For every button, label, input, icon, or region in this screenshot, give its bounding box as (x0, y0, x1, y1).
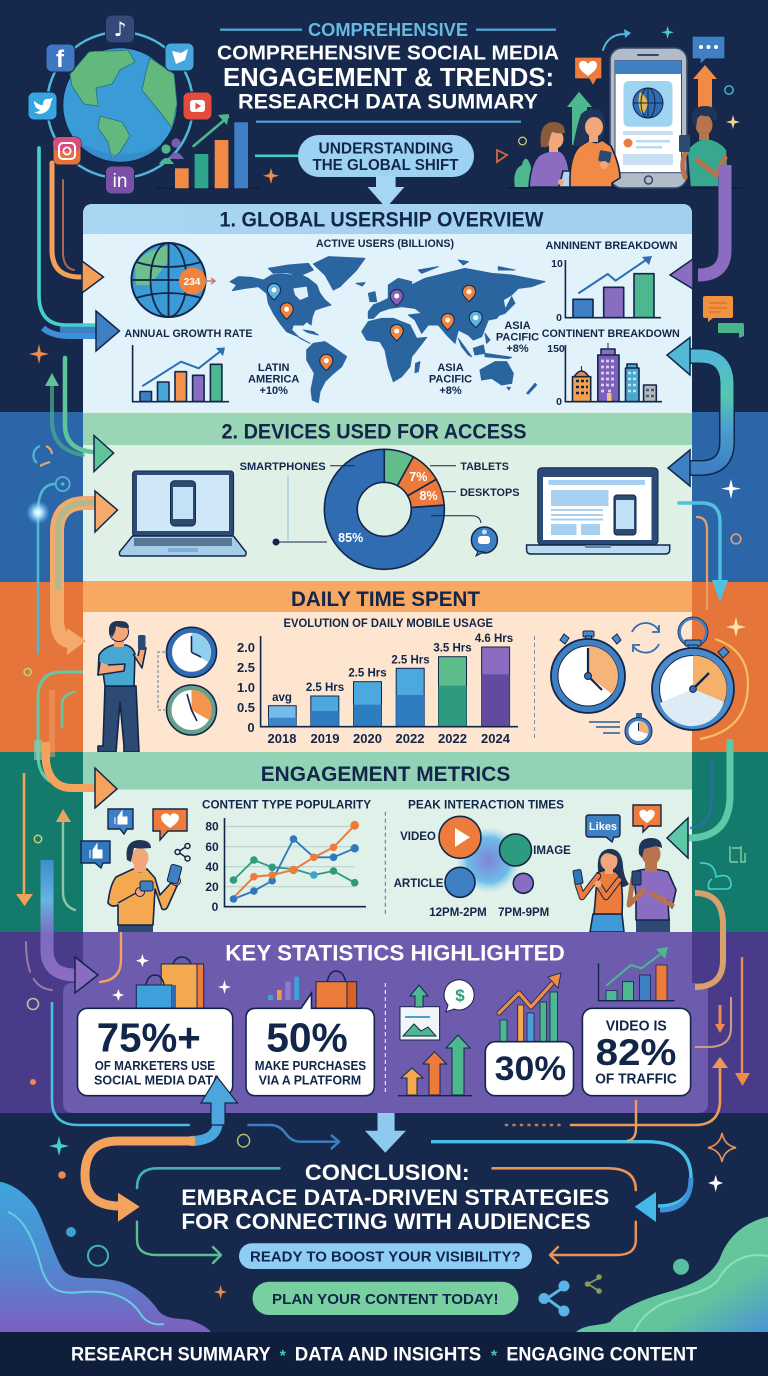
chart: city buildings: 0 (556, 396, 562, 408)
icon: dollar bubble: $ (455, 986, 465, 1005)
icon: laptop with phone (120, 471, 246, 556)
chart: content popularity lines: 40 (205, 860, 219, 874)
chart: city buildings: 150 (547, 343, 565, 355)
icon: orange sparkle (29, 344, 49, 364)
icon: share large (538, 1280, 570, 1316)
chart: content popularity lines: 0 (212, 900, 219, 914)
chart: peak interaction bubbles: 12PM-2PM (429, 907, 487, 919)
label: asia pacific lower: +8% (439, 385, 462, 397)
chart: device donut (324, 449, 444, 569)
section 5 panel: key statistics (63, 932, 708, 1113)
icon: chart photo with arrow (400, 985, 440, 1040)
arrow: small blue (248, 1125, 339, 1149)
chart: peak interaction bubbles: 7PM-9PM (498, 907, 549, 919)
conclusion section (0, 1003, 768, 1332)
heading: 1. GLOBAL USERSHIP OVERVIEW (220, 208, 544, 232)
arrow: small orange down (715, 1005, 725, 1033)
chart: content popularity lines (205, 818, 366, 914)
icon: stopwatch medium (551, 631, 625, 713)
icon: man with phone (629, 838, 676, 932)
icon: bars with orange arrow (499, 973, 561, 1042)
section 3 panel: daily time spent (83, 581, 692, 752)
chart: daily mobile usage bars (237, 633, 518, 746)
icon: chat bubbles (703, 296, 744, 338)
chart: daily mobile usage bars: 1.0 (237, 680, 255, 695)
icon: person purple (529, 122, 579, 187)
blob: left (0, 1182, 211, 1332)
icon: share (175, 844, 190, 861)
subheading: content type popularity: CONTENT TYPE POPULARITY (202, 798, 371, 812)
chart title: EVOLUTION OF DAILY MOBILE USAGE (284, 616, 493, 630)
stat card: 75%: 75%+ (97, 1015, 201, 1061)
footer strip: RESEARCH SUMMARY (71, 1344, 271, 1366)
icon: wire globe with counter: 234 (184, 277, 201, 288)
stat card: 50%: 50% (266, 1015, 348, 1061)
decorative accents (49, 1133, 736, 1299)
arrow: orange up with green tail (56, 809, 75, 910)
pill: understanding the global shift: UNDERSTANDING (318, 140, 454, 158)
label: asia pacific lower: ASIA (437, 362, 464, 374)
arrow: center down (365, 1113, 406, 1153)
label: anninent breakdown: ANNINENT BREAKDOWN (546, 240, 678, 252)
pill: ready to boost (239, 1243, 532, 1269)
footer strip: DATA AND INSIGHTS (295, 1344, 481, 1366)
icon: doc outline (730, 846, 745, 862)
icon: clock orange (166, 685, 216, 735)
arrow: orange to pill (550, 1222, 636, 1263)
globe with social media icons (28, 15, 212, 194)
map label: ACTIVE USERS (BILLIONS) (316, 238, 454, 250)
icon: laptop with web page (527, 468, 670, 554)
icon: heart bubble (574, 57, 602, 86)
footer strip: ENGAGING CONTENT (506, 1344, 697, 1366)
icon: white sparkle (721, 479, 741, 499)
arrow: orange up into bottom line (571, 1057, 728, 1125)
conclusion text: CONCLUSION: (305, 1160, 470, 1185)
arrow: cyan down (679, 503, 728, 602)
chart: daily mobile usage bars: 2.5 (237, 660, 255, 675)
icon: like bubble (108, 809, 133, 834)
decorative accents (263, 26, 740, 184)
chart: daily mobile usage bars: 2022 (396, 731, 424, 746)
icon: likes bubble: Likes (589, 821, 617, 833)
chart: daily mobile usage bars: 2.0 (237, 640, 255, 655)
stat card: 82%: VIDEO IS (606, 1018, 667, 1035)
icon: shopping bags (136, 957, 204, 1008)
pill: understanding the global shift (298, 135, 474, 177)
arrow: purple into section 1 (670, 165, 725, 289)
chart: content popularity lines: 80 (205, 820, 219, 834)
arrow: orange into section 1 (52, 163, 104, 293)
icon: small stopwatch with speed lines (589, 713, 652, 744)
label: asia pacific right: PACIFIC (496, 332, 539, 344)
icon: share small (585, 1274, 602, 1294)
stat card: 82% (582, 1008, 691, 1096)
icon: orange shopping bag (316, 971, 357, 1008)
section 2 panel: devices (83, 412, 692, 582)
icon: cloud outline (700, 863, 731, 889)
icon: bush (514, 159, 532, 187)
section 1 panel: global usership (83, 204, 692, 412)
arrow: long orange down (735, 957, 750, 1086)
stat card: 82%: OF TRAFFIC (595, 1071, 677, 1087)
label: asia pacific lower (429, 362, 472, 397)
mini bar icon (268, 977, 299, 1000)
icon: heart bubble right (633, 805, 661, 832)
line: dotted (506, 1124, 564, 1126)
arrow: cyan into section 1 (39, 148, 120, 351)
arrow: orange curve to conclusion (85, 1141, 195, 1222)
chart: city buildings (547, 343, 662, 408)
chart: content popularity lines: 60 (205, 840, 219, 854)
blob: right (576, 1217, 768, 1332)
chart: device donut: 7% (409, 470, 427, 484)
heading: ENGAGEMENT METRICS (261, 763, 510, 786)
label: latin america: LATIN (258, 362, 290, 374)
chart: anninent breakdown: 10 (551, 258, 563, 270)
stat card: 82%: 82% (596, 1032, 676, 1073)
chart: daily mobile usage bars: 2018 (268, 731, 296, 746)
pill: plan your content (252, 1282, 518, 1315)
sparkles (112, 954, 231, 1001)
label: asia pacific right: +8% (506, 343, 529, 355)
chart: daily mobile usage bars: 4.6 Hrs (475, 633, 513, 645)
icon: woman orange (570, 109, 620, 187)
arrow: big orange into section 3 (57, 491, 118, 655)
icon: three rising arrows (398, 1035, 472, 1096)
arrow: green into section 2 (65, 358, 114, 472)
stat card: 50% (246, 993, 374, 1096)
kicker: COMPREHENSIVE (308, 20, 468, 40)
label: asia pacific right (496, 320, 539, 355)
stat card: 75%: SOCIAL MEDIA DATA (94, 1073, 221, 1087)
chart: daily mobile usage bars: 2.5 Hrs (348, 668, 387, 680)
icon: likes bubble (586, 815, 620, 842)
pill: understanding the global shift: THE GLOBAL SHIFT (312, 157, 459, 174)
label: continent breakdown: CONTINENT BREAKDOWN (542, 328, 680, 340)
chart: daily mobile usage bars: 2020 (353, 731, 382, 746)
icon: instagram (53, 137, 81, 165)
icon: wire globe with counter (132, 243, 215, 317)
stat card: 50%: VIA A PLATFORM (259, 1073, 361, 1087)
arrow: cyan to conclusion (431, 1142, 691, 1222)
icon: refresh arrows (632, 623, 659, 653)
icon: dollar bubble (444, 980, 474, 1012)
subheading: peak interaction times: PEAK INTERACTION TIMES (408, 798, 564, 812)
leader lines (273, 475, 481, 545)
icon: stopwatch large (652, 617, 748, 739)
chart: peak interaction bubbles: ARTICLE (394, 878, 444, 890)
line: thin orange (697, 517, 707, 609)
chart: daily mobile usage bars: 2.5 Hrs (306, 682, 344, 694)
line: cyan left (52, 1003, 189, 1125)
label: tablets: TABLETS (460, 461, 509, 473)
map pins (268, 284, 482, 371)
icon: teal curved arrow (603, 29, 631, 50)
heading: DAILY TIME SPENT (291, 588, 480, 611)
pill: plan your content: PLAN YOUR CONTENT TODAY! (272, 1291, 499, 1308)
footer strip (0, 1332, 768, 1376)
icon: person with phone (98, 621, 146, 752)
icon: linkedin (106, 166, 134, 194)
arrow: green up (45, 373, 83, 455)
label: asia pacific lower: PACIFIC (429, 374, 472, 386)
arrow: teal and orange into section 4 (38, 672, 117, 808)
line: faint purple curve (26, 942, 52, 990)
header title block (217, 20, 559, 123)
chart: device donut: 85% (338, 531, 363, 545)
arrow: intro down arrow (368, 176, 404, 208)
line: glowing node (26, 477, 70, 653)
chart: device donut: 8% (420, 489, 438, 503)
frame: teal top left (137, 1168, 279, 1188)
chart: daily mobile usage bars: 3.5 Hrs (433, 642, 472, 654)
left side connectors (16, 148, 121, 1085)
icon: tiktok: ♪ (114, 17, 126, 41)
arrow: blue up over card (190, 1077, 238, 1141)
title line 3: RESEARCH DATA SUMMARY (238, 90, 538, 114)
chart: daily mobile usage bars: 0.5 (237, 700, 255, 715)
icon: heart bubble (153, 809, 187, 840)
icon: green up arrow (567, 92, 592, 145)
icon: chat bubble badge (471, 527, 497, 556)
chart: daily mobile usage bars: 2022 (438, 731, 467, 746)
icon: clock blue (166, 627, 216, 677)
connector line (255, 154, 299, 157)
icon: smartphone (610, 48, 687, 188)
icon: woman with phone (573, 849, 629, 932)
chart: annual growth bars (133, 345, 229, 402)
label: desktops: DESKTOPS (460, 487, 519, 499)
heading: 2. DEVICES USED FOR ACCESS (222, 420, 526, 444)
conclusion text: FOR CONNECTING WITH AUDIENCES (181, 1209, 591, 1234)
line: orange vertical (627, 1100, 636, 1141)
icon: sparkle yellow (726, 617, 746, 637)
icon: chat bubble (692, 36, 725, 65)
label: latin america (248, 362, 299, 397)
title line 1: COMPREHENSIVE SOCIAL MEDIA (217, 42, 559, 64)
icon: facebook: f (56, 46, 65, 73)
world map (230, 257, 545, 403)
line: orange curve (100, 933, 121, 982)
chart: anninent breakdown (551, 256, 661, 324)
title line 2: ENGAGEMENT & TRENDS: (223, 62, 554, 92)
icon: tiktok (106, 15, 134, 43)
icon: orange up arrow (693, 65, 717, 108)
top right: phone and people illustration (263, 26, 743, 188)
stat card: 30%: 30% (495, 1050, 566, 1088)
chart: daily mobile usage bars: 2024 (481, 731, 511, 746)
label: tablets (430, 461, 509, 473)
arrow: teal into section 4 (667, 739, 730, 858)
footer strip: * (491, 1348, 498, 1365)
right side connectors (571, 165, 750, 1125)
chart: content popularity lines: 20 (205, 880, 219, 894)
icon: linkedin: in (113, 171, 127, 192)
arrow: double ended blue curve (667, 338, 727, 486)
icon: like bubble left (81, 841, 110, 868)
icon: man teal (679, 106, 728, 187)
chart: anninent breakdown: 0 (556, 312, 562, 324)
chart: peak interaction bubbles: VIDEO (400, 831, 436, 843)
stat card: 50%: MAKE PURCHASES (255, 1059, 366, 1073)
conclusion text: EMBRACE DATA-DRIVEN STRATEGIES (181, 1185, 609, 1210)
chart: daily mobile usage bars: 2019 (311, 731, 339, 746)
label: asia pacific right: ASIA (504, 320, 531, 332)
arrow: green to pill (137, 1222, 221, 1263)
arrow: orange down (16, 773, 33, 906)
label: smartphones: SMARTPHONES (240, 461, 326, 473)
icon: person with phones (108, 840, 182, 932)
stat card: 75%: OF MARKETERS USE (95, 1059, 215, 1073)
section 4 panel: engagement metrics (81, 752, 692, 932)
chart: daily mobile usage bars: 0 (247, 720, 255, 735)
chart: peak interaction bubbles: IMAGE (533, 845, 571, 857)
footer strip: * (280, 1348, 287, 1365)
heading: KEY STATISTICS HIGHLIGHTED (225, 941, 565, 966)
arrow: purple into section 5 (47, 860, 98, 993)
stat card: 75% (78, 1008, 233, 1096)
icon: twitter bird (28, 92, 57, 120)
conclusion text (181, 1160, 609, 1234)
label: latin america: +10% (259, 385, 288, 397)
chart: daily mobile usage bars: 2.5 Hrs (391, 654, 430, 666)
chart: daily mobile usage bars: avg (272, 692, 292, 704)
icon: blue social tile (165, 43, 194, 71)
icon: facebook (46, 44, 75, 73)
label: annual growth rate: ANNUAL GROWTH RATE (124, 328, 252, 340)
icon: dashed ring (33, 446, 52, 466)
frame: orange top right (493, 1168, 636, 1190)
pill: ready to boost: READY TO BOOST YOUR VISIBILITY? (250, 1250, 521, 1266)
line: orange curve to section 5 (695, 893, 723, 987)
label: latin america: AMERICA (248, 374, 299, 386)
icon: earth globe (62, 48, 178, 162)
stat card: 30% (485, 1042, 574, 1096)
line: curve (695, 997, 731, 1047)
icon: youtube (183, 92, 212, 120)
icon: chart with teal arrow (598, 947, 674, 1001)
chart: peak interaction bubbles (394, 816, 571, 919)
growth bar chart near globe (157, 114, 260, 189)
